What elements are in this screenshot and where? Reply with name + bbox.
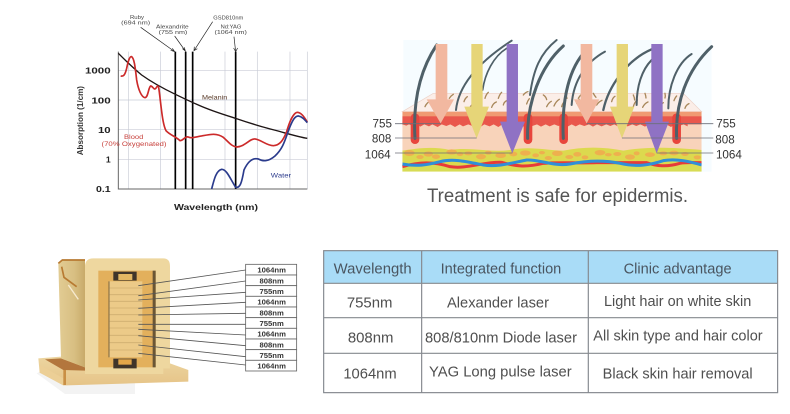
leader lines and wavelength labels: 808nm [260, 340, 284, 349]
leader lines and wavelength labels: 1064nm [257, 298, 286, 307]
laser name labels: (755 nm) [159, 30, 187, 36]
water curve [212, 116, 307, 189]
axis tick labels: 1000 [85, 66, 111, 76]
device shadow [37, 372, 135, 394]
laser name labels: Nd:YAG [221, 25, 241, 31]
leader lines and wavelength labels: 755nm [260, 287, 284, 296]
laser name labels [121, 15, 247, 36]
axis tick labels [85, 66, 111, 194]
laser name labels: (694 nm) [121, 20, 150, 26]
inner cavity [98, 271, 156, 367]
laser stack device [37, 258, 188, 394]
axis tick labels: 0.1 [96, 184, 111, 194]
row 755nm: 755nm [347, 294, 392, 311]
row 808nm: 808/810nm Diode laser [425, 330, 577, 347]
blood vessels [402, 162, 702, 167]
absorption chart [75, 15, 307, 212]
leader lines and wavelength labels: 808nm [260, 308, 284, 317]
fat cells [404, 149, 701, 160]
row 1064nm: Black skin hair removal [603, 366, 753, 383]
comparison table [324, 251, 778, 393]
depth labels right: 808 [715, 134, 735, 147]
stack clamps [113, 272, 137, 281]
leader arrows [141, 22, 238, 52]
skin penetration diagram [365, 40, 742, 172]
leader lines and wavelength labels: 808nm [260, 276, 284, 285]
laser name labels: Ruby [130, 15, 144, 21]
short surface hairs [425, 92, 689, 108]
depth labels left: 1064 [365, 148, 391, 161]
caption: Treatment is safe for epidermis. [427, 186, 688, 207]
leader lines and wavelength labels: 755nm [260, 319, 284, 328]
leader lines and wavelength labels [138, 264, 297, 371]
leader lines and wavelength labels: 1064nm [257, 362, 286, 371]
side wall [58, 260, 85, 367]
depth labels right [715, 118, 742, 161]
axis tick labels: 10 [98, 125, 111, 135]
blood curve [121, 57, 307, 147]
axis tick labels: 1 [106, 155, 111, 165]
depth labels left: 755 [373, 118, 392, 131]
row 1064nm: YAG Long pulse laser [429, 364, 572, 381]
depth lines [395, 124, 713, 153]
row 808nm: All skin type and hair color [593, 328, 763, 345]
absorption chart: (70% Oxygenated) [101, 141, 166, 148]
absorption chart: Water [271, 173, 291, 180]
laser wavelength lines [175, 52, 236, 189]
header row: Wavelength [334, 261, 412, 278]
header row [334, 261, 732, 278]
laser name labels: (1064 nm) [214, 30, 247, 36]
front frame [85, 258, 170, 374]
leader lines and wavelength labels: 1064nm [257, 266, 286, 275]
laser name labels: GSD810nm [213, 16, 244, 22]
skin layers [402, 112, 702, 172]
arrows [427, 44, 669, 153]
row 808nm [348, 328, 763, 347]
table header background [324, 251, 778, 283]
leader lines and wavelength labels: 1064nm [257, 330, 286, 339]
row 755nm: Light hair on white skin [604, 293, 751, 310]
row 1064nm: 1064nm [343, 366, 397, 383]
row 755nm: Alexander laser [447, 294, 549, 311]
row 755nm [347, 293, 751, 311]
curve labels: Melanin [202, 94, 228, 101]
skin surface [402, 93, 702, 112]
depth labels right: 755 [716, 118, 736, 131]
row 808nm: 808nm [348, 330, 393, 347]
absorption chart: Blood [124, 134, 144, 141]
row 1064nm [343, 364, 753, 383]
laser name labels: Alexandrite [156, 24, 189, 30]
leader lines and wavelength labels: 755nm [260, 351, 284, 360]
base plate [38, 357, 188, 385]
wavelength label boxes [246, 264, 297, 371]
long hairs with follicles [411, 40, 712, 144]
depth labels right: 1064 [716, 148, 742, 161]
header row: Clinic advantage [624, 261, 732, 278]
depth labels left [365, 118, 392, 161]
melanin curve [118, 53, 307, 138]
header row: Integrated function [441, 261, 561, 278]
axis tick labels: 100 [91, 95, 111, 105]
x axis title: Wavelength (nm) [174, 202, 258, 212]
diode bars [109, 281, 142, 357]
depth labels left: 808 [372, 132, 391, 145]
y axis title: Absorption (1/cm) [75, 86, 85, 155]
